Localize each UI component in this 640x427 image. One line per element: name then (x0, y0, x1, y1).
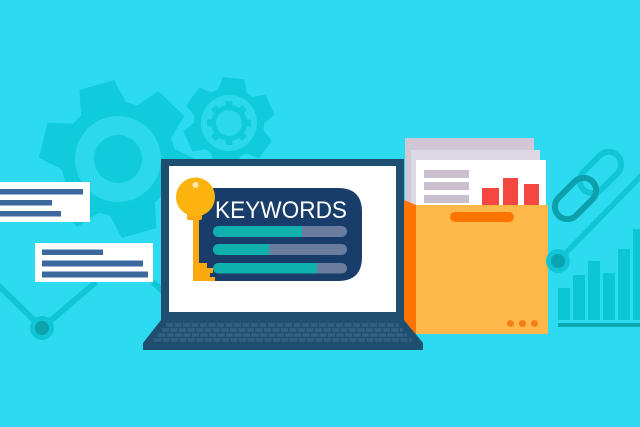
front paper (416, 160, 546, 210)
heading: keywords: KEYWORDS (215, 197, 347, 224)
chart line with node, left (0, 282, 168, 340)
progress bar 3 (213, 263, 347, 274)
laptop screen (169, 166, 396, 312)
red bar chart (482, 178, 539, 206)
icon: small gear (182, 77, 276, 169)
progress bar 2 (213, 244, 347, 255)
folder spine (404, 200, 416, 334)
folder with documents (404, 138, 548, 334)
callout card: upper (0, 182, 90, 222)
callout card: lower (35, 243, 153, 282)
laptop (143, 159, 423, 350)
paper text lines (424, 170, 469, 203)
icon: key (176, 178, 215, 281)
folder front (416, 205, 548, 334)
folder dots (507, 320, 538, 327)
laptop base and keyboard (143, 320, 423, 350)
laptop screen bezel (161, 159, 404, 321)
progress bar 1 (213, 226, 347, 237)
folder handle (450, 212, 514, 222)
middle paper (411, 150, 540, 210)
back paper (405, 138, 534, 208)
icon: chain link (550, 147, 626, 224)
bar chart, right (558, 229, 640, 327)
chart line with node, right (546, 173, 640, 273)
keywords panel (199, 188, 362, 281)
icon: large gear (37, 78, 199, 240)
